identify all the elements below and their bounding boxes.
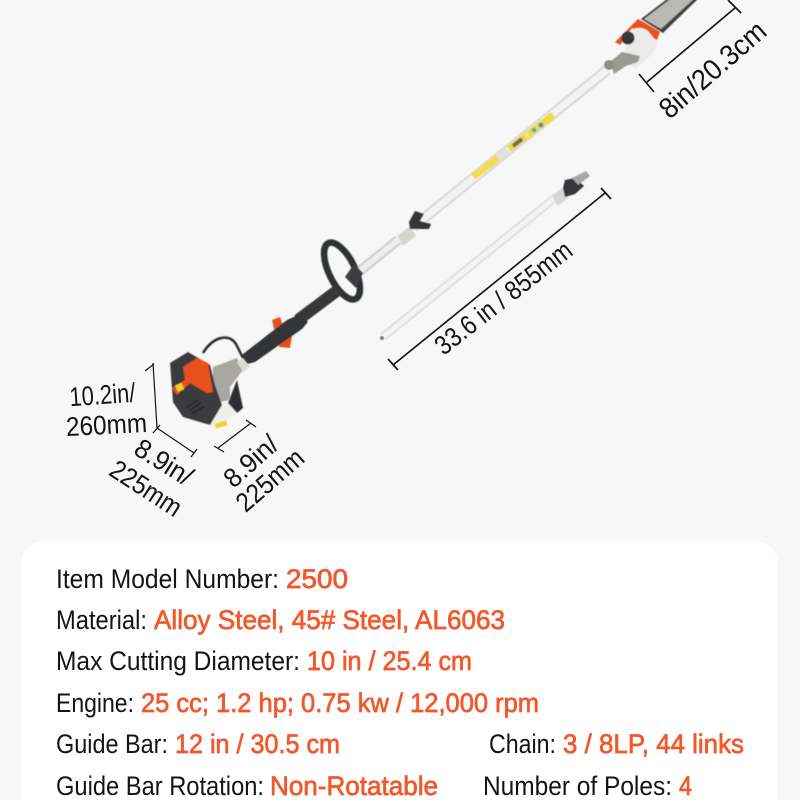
spec: material: Alloy Steel, 45# Steel, AL6063 [154, 605, 505, 635]
dimension: engine width left: 225mm [104, 454, 188, 523]
spec: item model number: Item Model Number: [56, 564, 279, 594]
spec: chain [489, 729, 744, 759]
dimension: engine width left [104, 425, 199, 523]
yellow shaft label [473, 115, 553, 177]
dimension: engine height [65, 363, 157, 442]
spec: chain: Chain: [489, 729, 556, 759]
dimension: engine width right [214, 420, 310, 518]
extension pole clamp [552, 171, 590, 206]
dimension: engine height: 10.2in/ [68, 378, 137, 412]
spec: item model number: 2500 [286, 564, 348, 594]
dimension: extension pole length [388, 188, 611, 370]
dimension: engine width right: 225mm [230, 443, 310, 518]
spec: material: Material: [56, 605, 147, 635]
spec: guide bar [56, 729, 340, 759]
spec: engine: 25 cc; 1.2 hp; 0.75 kw / 12,000 rpm [141, 688, 539, 718]
D-loop handle [317, 237, 367, 305]
main shaft [360, 70, 607, 271]
panel: specifications [22, 542, 778, 800]
dimension: engine height: 260mm [65, 408, 148, 442]
dimension: extension pole length: 33.6 in / 855mm [429, 235, 578, 361]
spec: engine: Engine: [56, 688, 134, 718]
dimension: chain bar length: 8in/20.3cm [653, 15, 773, 125]
illustration: pole saw main assembly [170, 0, 701, 428]
spec: guide bar rotation [56, 771, 438, 800]
handle grip [242, 290, 338, 364]
spec: guide bar: Guide Bar: [56, 729, 168, 759]
engine unit [170, 338, 250, 428]
dimension: engine width left: 8.9in/ [129, 433, 199, 492]
spec: max cutting diameter: Max Cutting Diameter: [56, 646, 300, 676]
spec: max cutting diameter: 10 in / 25.4 cm [307, 646, 472, 676]
spec: guide bar: 12 in / 30.5 cm [175, 729, 340, 759]
dimension: engine width right: 8.9in/ [218, 429, 285, 494]
saw head [604, 19, 660, 74]
spec: max cutting diameter [56, 646, 472, 676]
guide bar and chain [641, 0, 701, 33]
illustration: extension pole [380, 171, 590, 340]
spec: chain: 3 / 8LP, 44 links [563, 729, 744, 759]
shaft clamp [397, 211, 431, 246]
